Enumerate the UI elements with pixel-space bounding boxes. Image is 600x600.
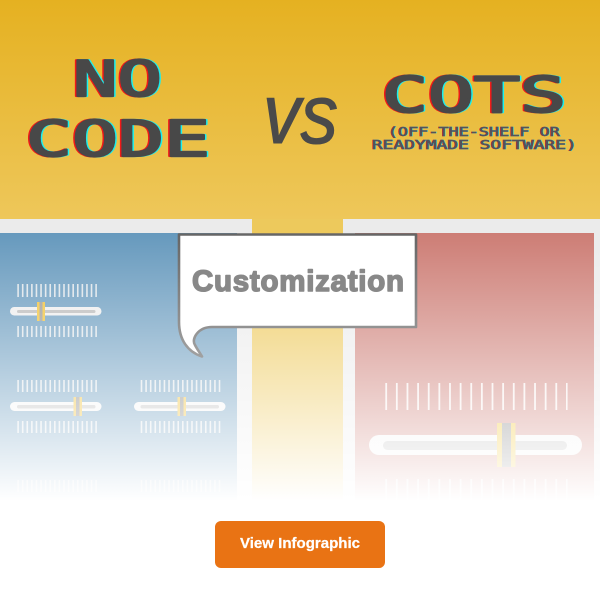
slider: large <box>369 396 582 490</box>
slider ticks: faded lower row <box>17 480 220 492</box>
white fade overlay <box>0 233 600 501</box>
heading: No Code: CODE <box>26 111 210 168</box>
panel: COTS <box>343 219 600 509</box>
button label: View Infographic <box>240 535 360 552</box>
heading: vs: vs <box>263 67 338 161</box>
slider: middle right <box>134 386 226 427</box>
slider: middle left <box>10 386 102 427</box>
heading: No Code <box>26 51 210 168</box>
subheading: off-the-shelf or readymade software: READYMADE SOFTWARE) <box>372 137 577 152</box>
heading: No Code: NO <box>73 51 162 108</box>
header background <box>0 0 600 219</box>
heading: COTS: COTS <box>382 67 566 124</box>
subheading: off-the-shelf or readymade software <box>372 124 577 152</box>
slider: top left <box>10 290 102 332</box>
callout text: Customization <box>192 265 404 298</box>
callout: customization <box>179 234 416 356</box>
button: view infographic <box>215 521 385 568</box>
panel: no code <box>0 219 252 509</box>
subheading: off-the-shelf or readymade software: (OFF-THE-SHELF OR <box>388 124 561 139</box>
panel: centre yellow column <box>252 219 343 509</box>
